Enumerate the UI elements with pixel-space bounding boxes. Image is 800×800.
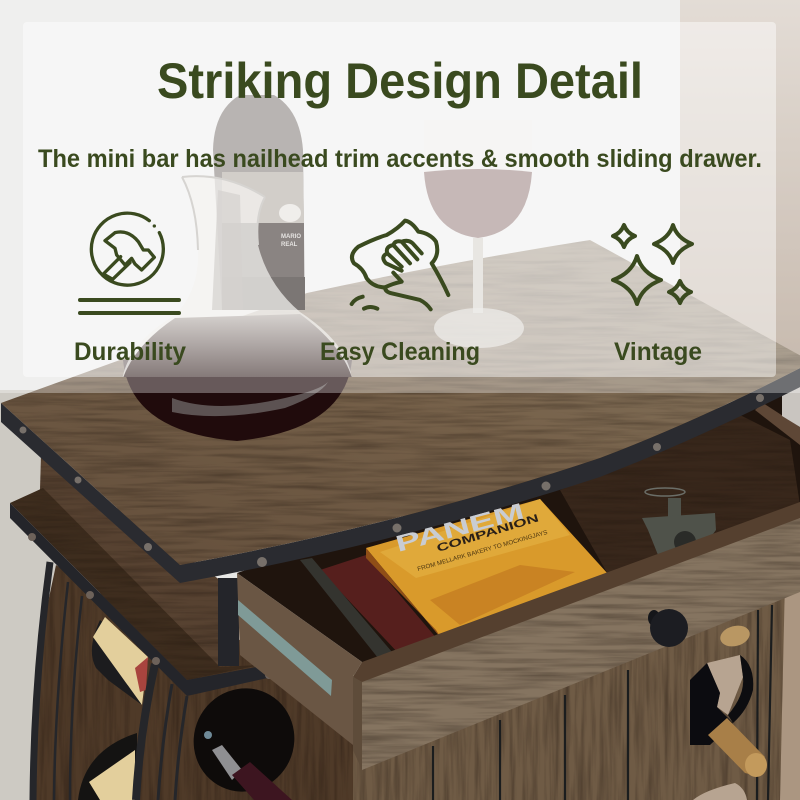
bottle label dark band [222,223,304,277]
yellow book: FROM MELLARK BAKERY TO MOCKINGJAYS [417,530,548,573]
center bottle in hole [177,672,311,800]
faded wine bottle [213,95,305,310]
fingers [383,241,422,271]
book title: PANEM [393,498,527,557]
bottle label text: MARIO [281,234,301,240]
faded decanter glass [122,176,352,382]
wine in glass [424,169,532,238]
drawer side wall [237,573,362,745]
title: Striking Design Detail [157,53,643,109]
drawer interior wood floor [560,415,800,578]
drawer knob [648,609,688,647]
sparkle top right [654,225,692,263]
yellow book: COMPANION [435,512,540,555]
palm [385,273,431,309]
lower hole [693,783,747,800]
ground lines [80,300,179,313]
table front edge [1,362,800,583]
hammer head [105,232,154,270]
full-width translucent overlay [0,0,800,393]
cloth [352,221,448,295]
drawer right inner wall [755,403,800,445]
right wall patch under table [782,383,800,427]
drawer front panel [353,502,800,770]
decanter neck shade [212,190,243,310]
circle dot [153,224,156,228]
label: easy cleaning: Easy Cleaning [320,338,480,366]
black barrel bands [33,562,187,800]
icon: hand wiping with cloth [352,221,448,309]
hammer circle [91,213,163,285]
plank lines [433,605,772,800]
hammer handle [103,257,130,279]
right side room background [680,0,800,400]
small sparkle bottom right [669,281,691,303]
lower left bottle in hole [78,733,137,800]
wipe marks [352,297,377,309]
drawer slide [238,600,332,696]
translucent text panel [23,22,776,377]
decanter reflection [172,382,328,416]
drawer interior [237,380,800,665]
faded wine bottle: REAL [281,242,298,248]
decanter rim and outline [182,176,265,250]
grey book edge [300,558,392,658]
shelf nails [28,533,273,679]
hole black crescent [728,655,753,723]
side shelf [10,488,272,696]
decanter wine fade [123,314,352,378]
stem [473,238,483,313]
label: durability: Durability [74,338,186,366]
yellow book [366,498,608,638]
floor on the right [760,440,800,800]
glass foot [434,308,524,348]
icon: vintage sparkles [613,225,692,304]
cabinet front planks [353,580,785,800]
bottle label [222,172,304,223]
bottle shoulder [690,663,733,745]
gold cork neck [708,718,767,777]
subtitle: The mini bar has nailhead trim accents & smooth sliding drawer. [38,145,762,173]
bottle lower shade [222,277,305,310]
table surface [1,240,800,565]
barrel left side [33,562,362,800]
red book [320,555,438,655]
right hole showing floor [707,655,743,715]
upper gold cork [718,622,752,650]
black post [218,578,239,666]
table top [1,240,800,583]
shelf black edge [10,503,272,696]
small sparkle top left [613,225,635,247]
cabinet side under the table [40,455,220,668]
label emblem [279,204,301,222]
wine glass [424,120,532,348]
upper left bottle in hole [92,617,148,705]
label: vintage: Vintage [614,338,702,366]
corkscrew [642,488,716,560]
decanter wine base [123,360,352,441]
left wall lower [0,390,60,800]
icon: hammer durability [80,213,179,313]
table nails [20,394,764,567]
large sparkle [613,256,661,304]
glass bowl top [424,120,532,175]
book cover numbers [430,565,575,625]
